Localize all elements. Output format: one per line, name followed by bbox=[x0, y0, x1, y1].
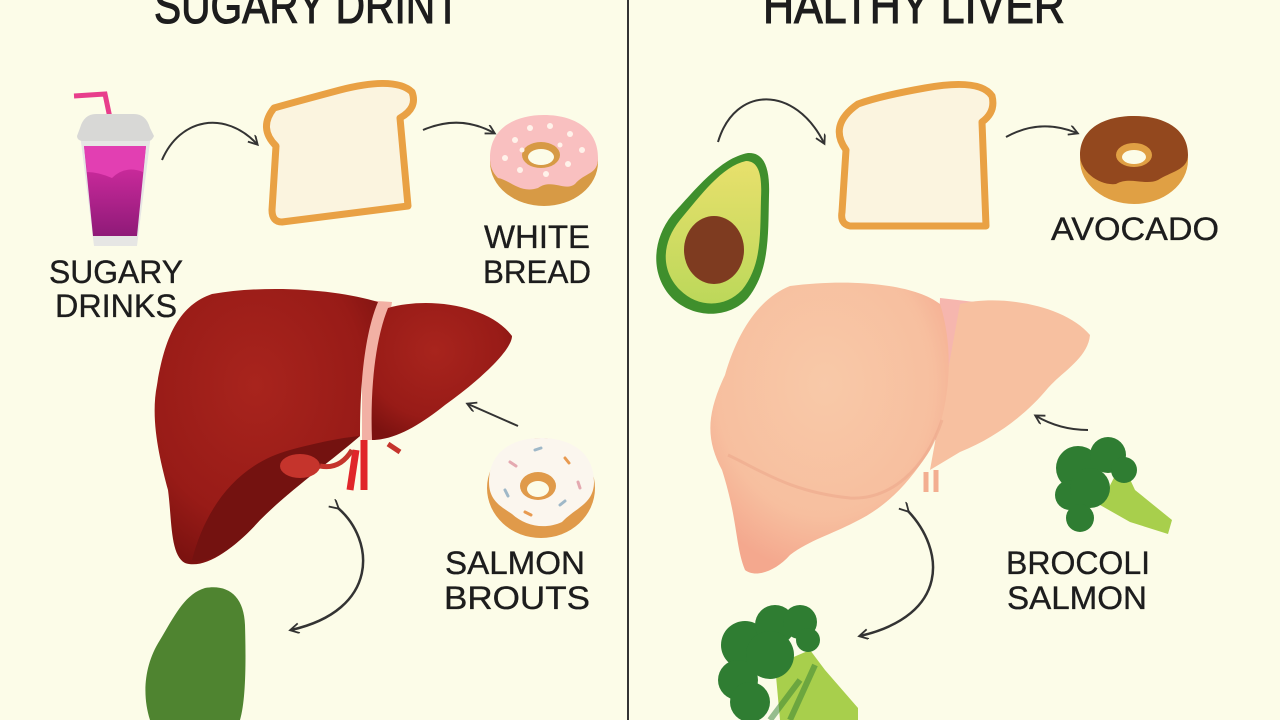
label: broccoli salmon: BROCOLI bbox=[1006, 545, 1150, 581]
liver: dark diseased bbox=[155, 289, 512, 564]
text: BREAD bbox=[483, 254, 591, 290]
icon: broccoli large bbox=[718, 605, 858, 720]
icon: sugary drink cup bbox=[74, 94, 154, 246]
arrow: bread to donut bbox=[423, 123, 494, 133]
icon: green avocado bbox=[145, 587, 245, 720]
arrow: avocado to liver bbox=[291, 508, 363, 630]
arrow: drink to bread bbox=[162, 123, 257, 160]
icon: white donut bbox=[487, 438, 595, 538]
icon: white bread left bbox=[266, 83, 414, 222]
icon: chocolate donut bbox=[1080, 116, 1188, 204]
arrow: broccoli to pale liver bbox=[1036, 416, 1088, 430]
arrow: bread to chocolate donut bbox=[1006, 126, 1077, 137]
label: sugary drinks: SUGARY bbox=[49, 254, 183, 290]
icon: avocado halved bbox=[656, 153, 769, 314]
text: SALMON bbox=[1007, 580, 1147, 616]
label: avocado: AVOCADO bbox=[1051, 211, 1219, 247]
arrow: avocado to bread bbox=[718, 99, 824, 143]
icon: broccoli small bbox=[1055, 437, 1172, 534]
text: BROUTS bbox=[444, 580, 590, 616]
label: salmon sprouts: SALMON bbox=[445, 545, 585, 581]
arrow: broccoli to pale liver lower bbox=[860, 511, 933, 636]
liver: pale fatty bbox=[710, 283, 1090, 574]
text: DRINKS bbox=[55, 288, 177, 324]
divider bbox=[627, 0, 629, 720]
icon: pink donut bbox=[490, 115, 598, 206]
arrow: donut to liver bbox=[468, 404, 518, 426]
label: white bread: WHITE bbox=[484, 219, 590, 255]
icon: white bread right bbox=[839, 84, 993, 226]
